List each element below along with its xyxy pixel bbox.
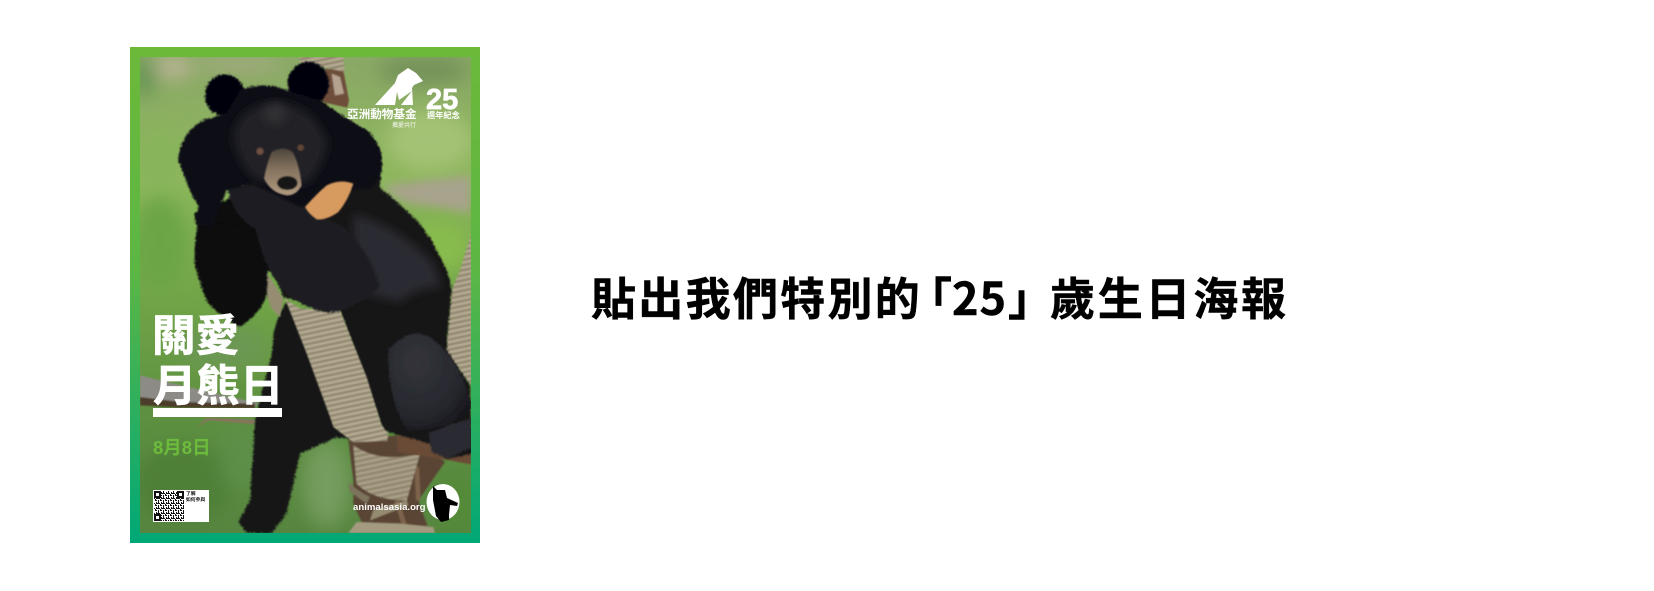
- left arm: [195, 220, 267, 327]
- tree trunk with ropes: [348, 435, 445, 533]
- bear head: [233, 102, 327, 195]
- foreleg hugging the post: [227, 185, 380, 312]
- bear face fur: [233, 102, 327, 184]
- date: 8月8日: [153, 437, 211, 458]
- anniversary caption: 週年紀念: [427, 110, 460, 120]
- bear torso: [240, 100, 472, 459]
- organisation name: 亞洲動物基金: [347, 107, 417, 121]
- QR code card: [153, 490, 209, 522]
- logo: Animals Asia with 25th anniversary: [347, 68, 460, 129]
- paw on the branch: [428, 419, 471, 459]
- title line 1: 關愛: [152, 313, 239, 361]
- chest patch: [305, 182, 353, 219]
- hind left leg: [238, 302, 360, 533]
- diagonal rope post: [265, 270, 388, 442]
- poster gradient border: [130, 47, 480, 543]
- title underline: [153, 408, 282, 417]
- heading: 」: [1008, 263, 1053, 328]
- left tree branch: [140, 375, 260, 427]
- bear ears: [205, 62, 329, 116]
- bear muzzle: [264, 149, 302, 195]
- right rope post: [446, 232, 472, 387]
- back highlight: [353, 214, 442, 302]
- QR caption: 了解: [186, 492, 196, 497]
- organisation tagline: 攜愛共行: [392, 121, 416, 129]
- icon: bear badge: [426, 484, 460, 522]
- heading: 「: [907, 263, 952, 328]
- arm join backing: [193, 197, 271, 272]
- QR code: [154, 491, 184, 521]
- forehead highlight: [263, 104, 287, 124]
- logo bear mark: [375, 68, 423, 105]
- heading: [591, 263, 1289, 328]
- photo background: blurred grass: [133, 55, 477, 534]
- bear eyes: [256, 144, 304, 155]
- bear nose: [277, 176, 297, 190]
- website: animalsasia.org: [353, 502, 426, 513]
- neck ruff: [178, 85, 382, 227]
- right tree branch: [397, 433, 471, 464]
- QR caption: 如何參與: [186, 496, 205, 503]
- heading: 貼出我們特別的: [591, 263, 922, 328]
- title line 2: 月熊日: [153, 363, 284, 411]
- anniversary number: 25: [426, 84, 458, 116]
- top rope and wood behind the ear: [299, 57, 349, 108]
- heading: 歲生日海報: [1050, 263, 1289, 328]
- upper hind leg: [388, 333, 471, 430]
- panel: poster: [130, 47, 480, 543]
- heading: 25: [952, 263, 1007, 328]
- poster title: [152, 313, 284, 417]
- bear photograph: [133, 55, 477, 534]
